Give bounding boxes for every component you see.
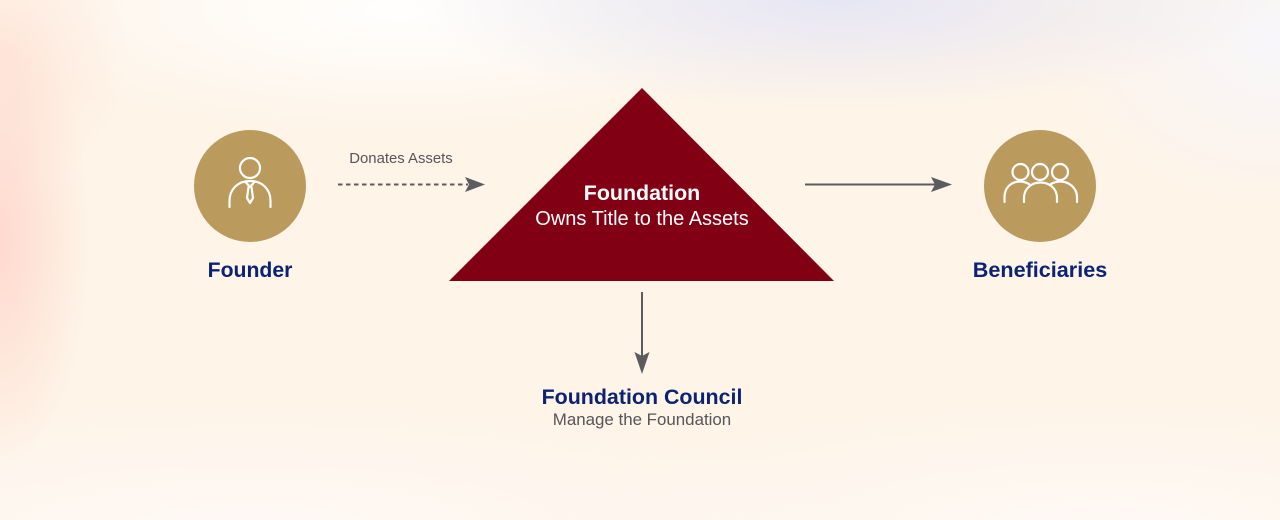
icon: beneficiaries	[984, 130, 1096, 242]
heading: Foundation Council: Foundation Council	[542, 385, 742, 409]
label: Donates Assets: Donates Assets	[349, 151, 453, 167]
icon: founder	[194, 130, 306, 242]
arrow: founder to foundation	[338, 177, 485, 192]
arrow: foundation to council	[634, 292, 650, 374]
heading: Foundation: Foundation	[584, 181, 700, 205]
label: Founder: Founder	[208, 259, 292, 282]
arrow: foundation to beneficiaries	[805, 177, 952, 192]
panel: foundation triangle	[449, 88, 834, 281]
text: owns title: Owns Title to the Assets	[535, 208, 749, 230]
label: Beneficiaries: Beneficiaries	[973, 257, 1107, 282]
text: manage the foundation: Manage the Foundation	[553, 410, 731, 429]
